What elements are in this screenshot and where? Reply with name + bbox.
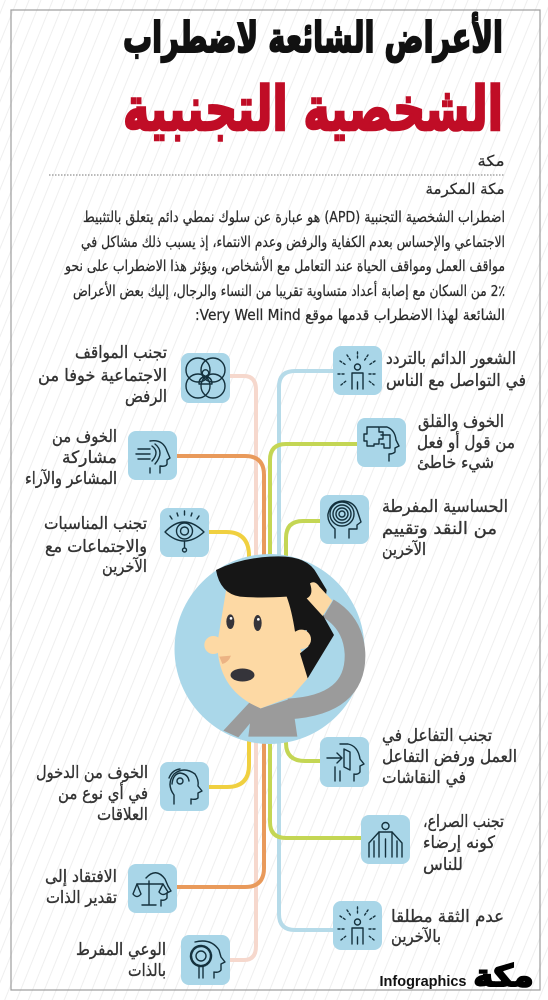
item: total distrust [333, 901, 504, 950]
footer logo: مكة [474, 959, 534, 994]
section label: city: مكة المكرمة [426, 180, 504, 198]
item: excessive self awareness: الوعي المفرط [76, 940, 166, 960]
item: lack of self esteem: تقدير الذات [46, 888, 117, 908]
item: total distrust: بالآخرين [391, 926, 441, 947]
item: fear and anxiety [357, 412, 515, 473]
item: avoid events: والاجتماعات مع [45, 537, 147, 557]
intro paragraph: الشائعة لهذا الاضطراب قدمها موقع Very Well Mind: [195, 306, 505, 324]
man: face [204, 587, 308, 708]
intro paragraph [64, 208, 505, 324]
item: fear and anxiety: شيء خاطئ [417, 453, 494, 473]
item: oversensitivity to criticism: الآخرين [382, 539, 426, 560]
item: avoid interaction at work: تجنب التفاعل في [382, 726, 492, 746]
footer logo [380, 959, 534, 994]
item: lack of self esteem [45, 864, 177, 913]
man: open mouth [230, 668, 254, 682]
icon: eye [160, 508, 209, 557]
icon: person with rays [333, 346, 382, 395]
item: fear of relationships: في أي نوع من [58, 782, 148, 804]
item: avoid conflict [361, 812, 504, 875]
central illustration: worried man [174, 554, 364, 744]
item: avoid conflict: تجنب الصراع، [423, 812, 504, 832]
icon: person with arms [361, 815, 410, 864]
item: fear of relationships: العلاقات [97, 805, 148, 825]
item: avoid social situations: تجنب المواقف [75, 343, 167, 363]
icon: head with puzzle [357, 418, 406, 467]
icon: overlapping circles [181, 353, 230, 403]
section label: city [49, 152, 505, 198]
item: fear of sharing feelings: الخوف من [52, 427, 117, 447]
intro paragraph: اضطراب الشخصية التجنبية (APD) هو عبارة عن سلوك نمطي دائم يتعلق بالتثبيط [83, 208, 505, 227]
item: avoid interaction at work: في النقاشات [382, 768, 466, 788]
icon: head with scales [128, 864, 177, 913]
item: avoid interaction at work: العمل ورفض التفاعل [382, 747, 517, 767]
man: hair [216, 556, 334, 678]
icon: person with rays [333, 901, 382, 950]
man: ear and hand [292, 582, 332, 649]
item: avoid events: الآخرين [102, 556, 147, 577]
icon: head with arrow [320, 737, 369, 787]
item: avoid social situations: الاجتماعية خوفا من [38, 366, 167, 386]
item: avoid social situations [38, 343, 230, 407]
item: fear of sharing feelings: مشاركة [62, 448, 117, 468]
icon: head with spiral [160, 762, 209, 811]
item: avoid conflict: للناس [423, 855, 463, 875]
item: total distrust: عدم الثقة مطلقا [391, 907, 504, 927]
item: fear of sharing feelings: المشاعر والآراء [25, 468, 117, 489]
title [123, 12, 503, 145]
icon: head with gear [181, 935, 230, 985]
item: avoid interaction at work [320, 726, 517, 788]
item: fear and anxiety: من قول أو فعل [417, 431, 515, 453]
item: fear of relationships: الخوف من الدخول [36, 763, 148, 783]
item: constant hesitation: في التواصل مع الناس [386, 371, 526, 391]
item: avoid events [44, 508, 209, 577]
item: oversensitivity to criticism: الحساسية المفرطة [382, 497, 508, 517]
item: excessive self awareness: بالذات [128, 961, 166, 981]
item: constant hesitation [333, 346, 526, 395]
icon: head with spiral [320, 495, 369, 544]
item: avoid conflict: كونه إرضاء [423, 833, 496, 853]
item: oversensitivity to criticism: من النقد وتقييم [382, 519, 497, 539]
man: shirt and arm [223, 608, 355, 737]
item: excessive self awareness [76, 935, 230, 985]
item: lack of self esteem: الافتقاد إلى [45, 867, 117, 887]
item: fear of relationships [36, 762, 209, 825]
item: avoid events: تجنب المناسبات [44, 514, 147, 534]
item: constant hesitation: الشعور الدائم بالتردد [386, 349, 516, 369]
footer logo: Infographics [380, 973, 466, 990]
item: fear of sharing feelings [25, 427, 177, 489]
item: fear and anxiety: الخوف والقلق [418, 412, 504, 432]
icon: head with hand [128, 431, 177, 480]
section label: city: مكة [478, 152, 504, 170]
connector lines [177, 371, 361, 960]
item: avoid social situations: الرفض [125, 387, 167, 407]
item: oversensitivity to criticism [320, 495, 508, 560]
